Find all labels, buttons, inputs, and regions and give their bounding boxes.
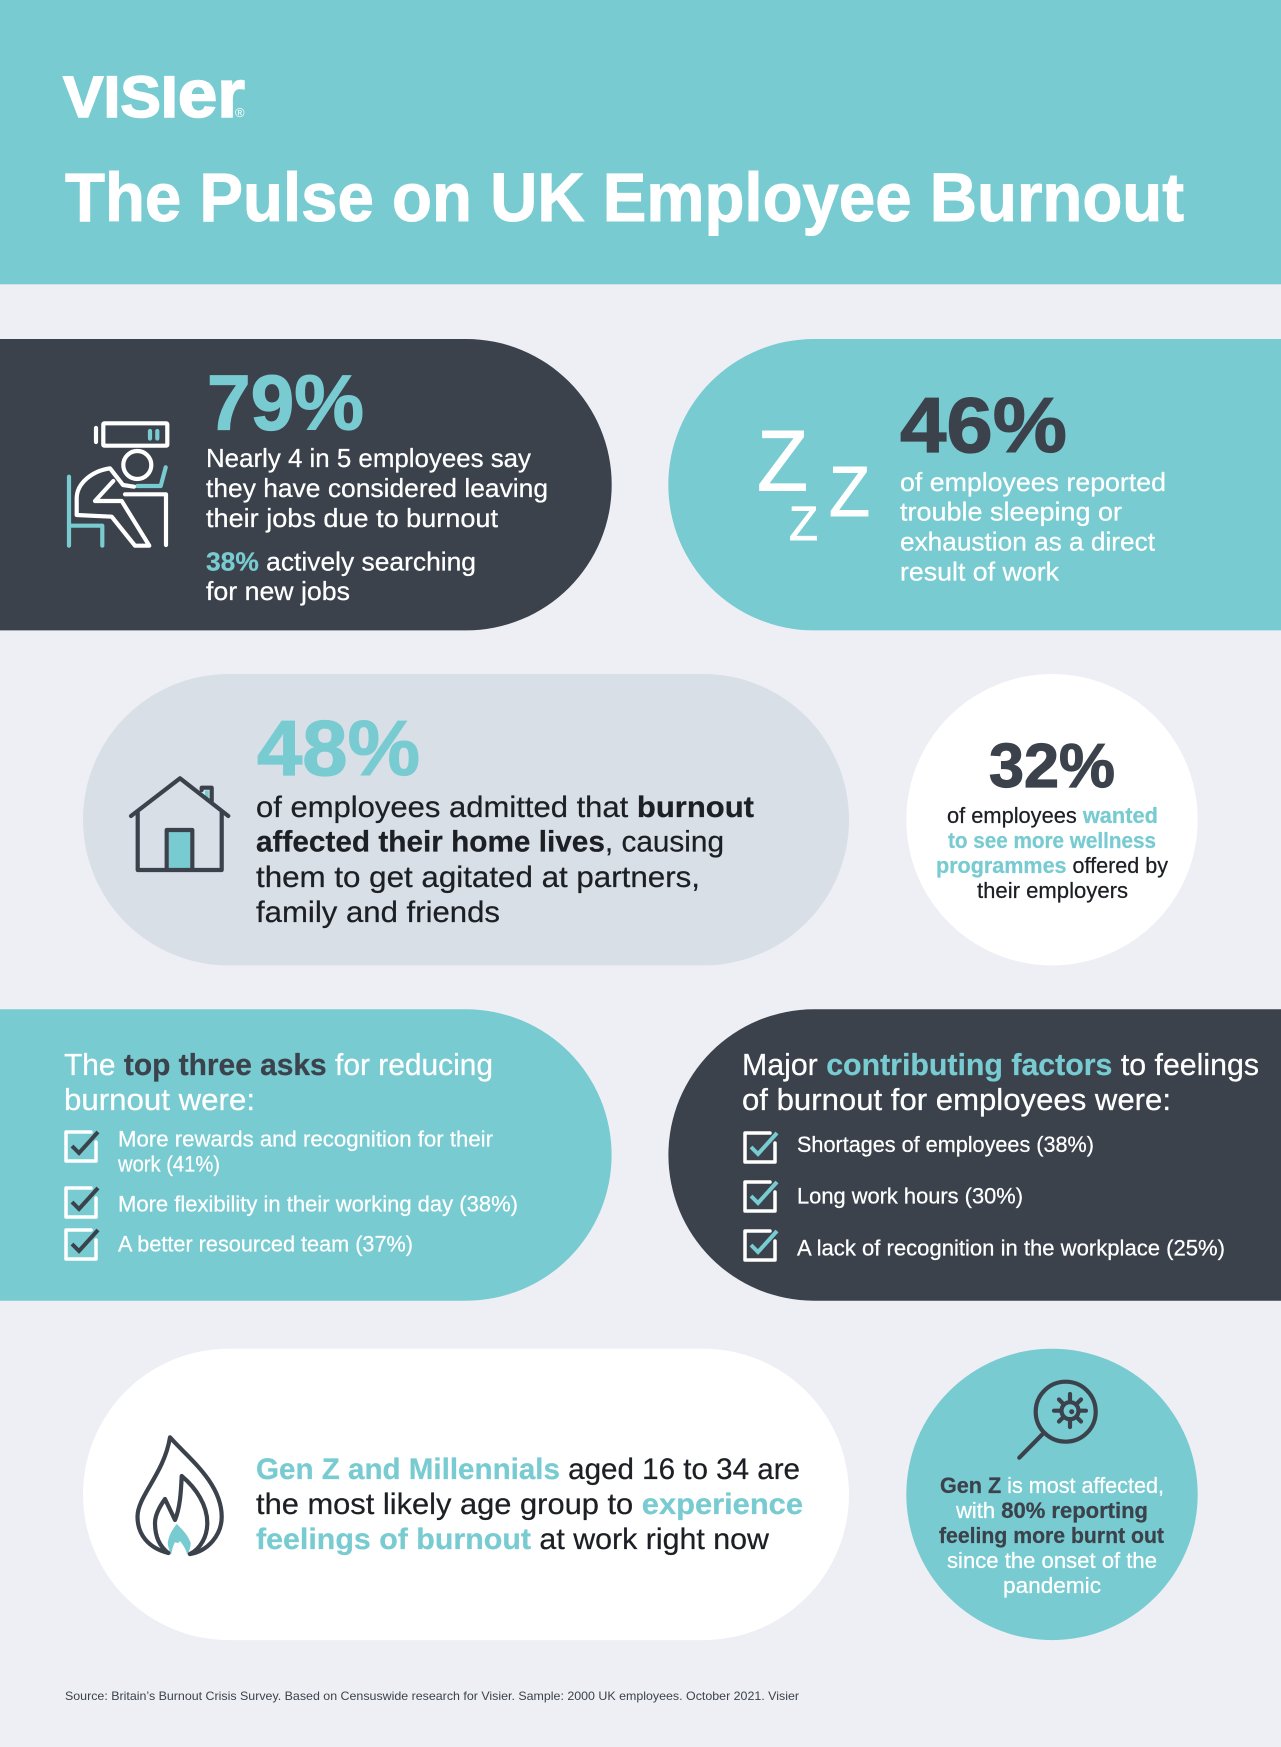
- list item: rewards: [66, 1126, 493, 1176]
- text: leaving jobs: Nearly 4 in 5 employees say: [206, 443, 531, 473]
- panel: Gen Z most affected: [906, 1349, 1198, 1640]
- heading: top three asks: burnout were:: [64, 1082, 255, 1117]
- text: leaving jobs: their jobs due to burnout: [206, 503, 499, 533]
- list item: rewards: work (41%): [117, 1152, 220, 1176]
- icon: house: [131, 778, 228, 870]
- panel: contributing factors: [668, 1009, 1281, 1301]
- stat: 48%: 48%: [257, 704, 420, 792]
- stat: 79%: 79%: [207, 358, 364, 446]
- icon: sleeping Z letters: [757, 414, 870, 551]
- text: Gen Z and Millennials: [256, 1453, 803, 1556]
- text: 38% searching: [206, 546, 476, 606]
- text: sleeping: [900, 467, 1166, 586]
- text: Gen Z and Millennials: the most likely age group to experience: [256, 1488, 803, 1521]
- logo: visier: ®: [235, 105, 245, 120]
- panel: Gen Z and Millennials: [83, 1349, 849, 1640]
- source note: Source: Britain’s Burnout Crisis Survey. Based on Censuswide research for Visier. Sample: 2000 UK employees. October 2021. Visier: [65, 1689, 799, 1703]
- list item: lack of recognition: A lack of recognition in the workplace (25%): [797, 1236, 1225, 1260]
- text: leaving jobs: they have considered leaving: [206, 473, 548, 503]
- heading: top three asks: The top three asks for reducing: [64, 1047, 493, 1082]
- logo: visier: VISIer: [63, 56, 245, 132]
- list item: resourced team: A better resourced team (37%): [118, 1232, 413, 1256]
- icon: sleeping Z letters: Z: [789, 498, 818, 551]
- icon: sleeping Z letters: Z: [757, 414, 808, 510]
- text: Gen Z most affected: feeling more burnt out: [939, 1523, 1165, 1548]
- heading: contributing factors: Major contributing factors to feelings: [742, 1047, 1259, 1082]
- text: Gen Z most affected: [939, 1473, 1165, 1598]
- icon: sleeping Z letters: Z: [829, 453, 870, 532]
- text: Gen Z most affected: since the onset of the: [947, 1548, 1157, 1573]
- list item: long hours: [745, 1182, 1023, 1211]
- text: sleeping: of employees reported: [900, 467, 1166, 497]
- text: wellness: of employees wanted: [947, 803, 1158, 828]
- header banner: [0, 0, 1281, 284]
- panel: 48% home lives: [83, 674, 849, 965]
- text: home lives: affected their home lives, causing: [256, 826, 724, 858]
- text: Gen Z and Millennials: feelings of burnout at work right now: [256, 1523, 769, 1556]
- text: sleeping: exhaustion as a direct: [900, 526, 1156, 556]
- text: Gen Z most affected: pandemic: [1003, 1573, 1101, 1598]
- text: home lives: them to get agitated at partners,: [256, 861, 700, 894]
- list item: flexibility: More flexibility in their working day (38%): [118, 1192, 518, 1216]
- stat: 46%: 46%: [900, 381, 1067, 469]
- list item: long hours: Long work hours (30%): [797, 1184, 1023, 1208]
- title: The Pulse on UK Employee Burnout: [65, 159, 1184, 236]
- text: Gen Z and Millennials: Gen Z and Millennials aged 16 to 34 are: [256, 1453, 800, 1486]
- text: wellness: their employers: [977, 878, 1128, 903]
- list item: rewards: More rewards and recognition for their: [118, 1126, 493, 1152]
- text: Gen Z most affected: with 80% reporting: [955, 1498, 1148, 1523]
- icon: burnt-out worker at desk: [69, 423, 167, 546]
- text: home lives: [256, 791, 754, 929]
- icon: flame: [138, 1437, 222, 1555]
- text: wellness: programmes offered by: [936, 853, 1168, 878]
- heading: contributing factors: of burnout for employees were:: [742, 1082, 1171, 1117]
- text: sleeping: trouble sleeping or: [900, 496, 1122, 526]
- list item: shortages: Shortages of employees (38%): [797, 1132, 1094, 1157]
- heading: contributing factors: [742, 1047, 1259, 1117]
- text: home lives: of employees admitted that burnout: [256, 791, 754, 824]
- text: leaving jobs: [206, 443, 548, 533]
- text: wellness: [936, 803, 1168, 903]
- panel: 32% wellness programmes: [906, 674, 1198, 965]
- panel: top three asks: [0, 1009, 612, 1301]
- text: wellness: to see more wellness: [948, 828, 1156, 853]
- text: sleeping: result of work: [900, 556, 1060, 586]
- stat: 32%: 32%: [989, 732, 1115, 801]
- heading: top three asks: [64, 1047, 493, 1117]
- text: home lives: family and friends: [256, 896, 500, 929]
- panel: 79% considered leaving: [0, 339, 612, 630]
- icon: magnifier with virus: [1019, 1382, 1096, 1458]
- text: 38% searching: 38% actively searching: [206, 546, 476, 576]
- text: Gen Z most affected: Gen Z is most affected,: [940, 1473, 1164, 1498]
- panel: 46% trouble sleeping: [668, 339, 1281, 630]
- text: 38% searching: for new jobs: [206, 576, 350, 606]
